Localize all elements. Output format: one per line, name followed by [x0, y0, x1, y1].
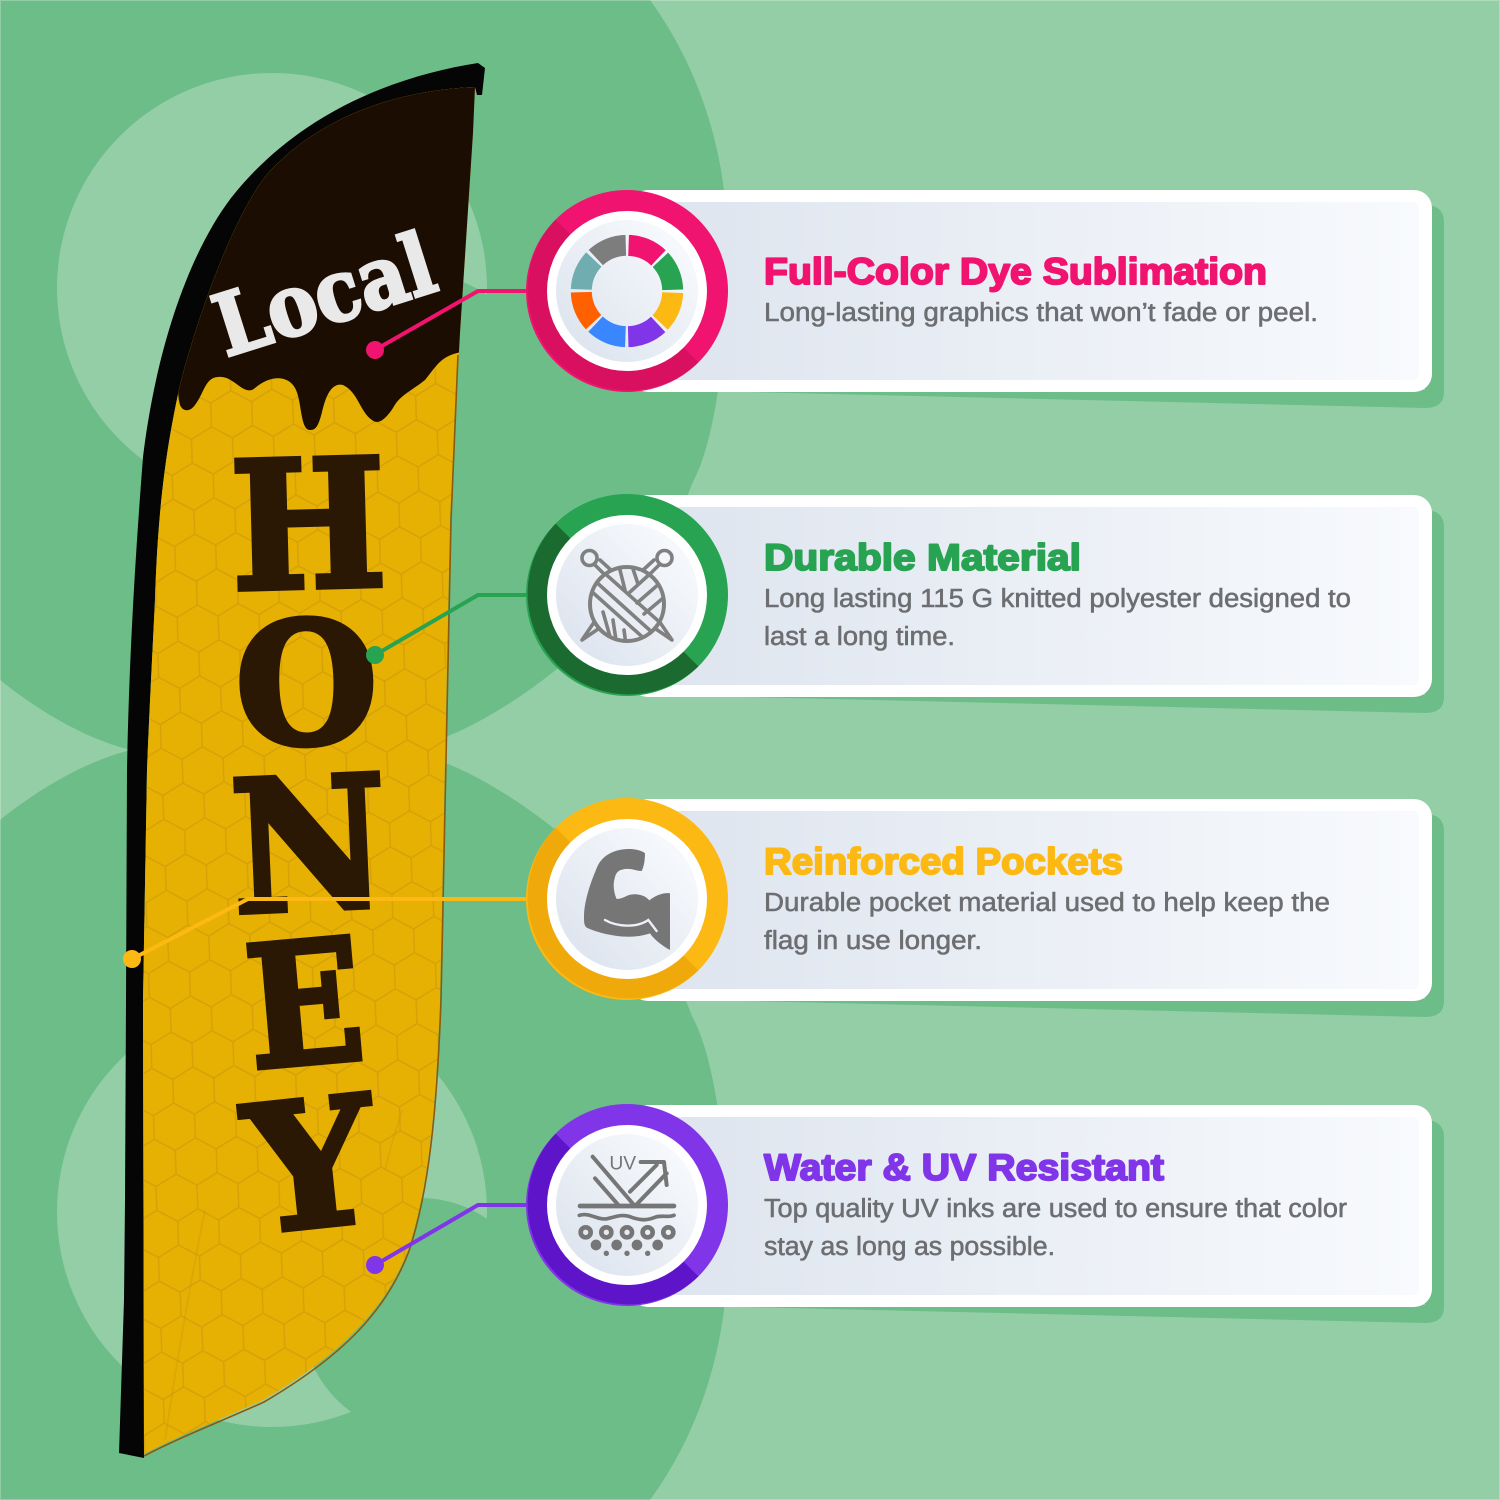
card 3: Reinforced Pockets — [526, 798, 1444, 1017]
description: Long lasting 115 G knitted polyester designed to — [764, 585, 1351, 613]
description — [764, 585, 1351, 651]
icon: flexed arm — [526, 798, 728, 1000]
card 1: Full-Color Dye Sublimation — [526, 190, 1444, 408]
description: last a long time. — [764, 623, 955, 651]
heading: Reinforced Pockets — [764, 841, 1123, 882]
card 4: Water & UV Resistant — [526, 1104, 1444, 1323]
flag letter O: O — [234, 585, 379, 785]
description: Top quality UV inks are used to ensure that color — [764, 1195, 1348, 1223]
heading: Full-Color Dye Sublimation — [764, 251, 1267, 292]
icon: UV resistant layers: UV — [609, 1153, 636, 1174]
flag text: Local: Local — [202, 213, 447, 376]
connector: pink — [366, 291, 530, 359]
flag letter N: N — [227, 735, 392, 956]
icon: ball of yarn with needles — [526, 494, 728, 696]
flag letter Y: Y — [235, 1058, 387, 1274]
flag letter H: H — [228, 420, 388, 631]
connector: green — [366, 595, 530, 664]
flag fabric edge stitching — [144, 355, 458, 1456]
description — [764, 889, 1330, 955]
heading: Water & UV Resistant — [764, 1147, 1164, 1188]
description: stay as long as possible. — [764, 1233, 1055, 1261]
description: Long-lasting graphics that won’t fade or peel. — [764, 299, 1318, 327]
card 2: Durable Material — [526, 494, 1444, 713]
description — [764, 1195, 1348, 1261]
flag pole sleeve — [119, 63, 485, 1458]
icon: UV resistant layers — [526, 1104, 728, 1306]
description: Durable pocket material used to help keep the — [764, 889, 1330, 917]
heading: Durable Material — [764, 537, 1081, 578]
flag dark honey drip top — [178, 87, 475, 430]
connector: yellow — [123, 899, 530, 968]
icon: color wheel — [526, 190, 728, 392]
flag letter E: E — [239, 901, 371, 1108]
description: flag in use longer. — [764, 927, 982, 955]
connector: purple — [366, 1205, 530, 1274]
flag: Local Honey — [119, 60, 490, 1460]
flag fabric — [143, 87, 475, 1454]
